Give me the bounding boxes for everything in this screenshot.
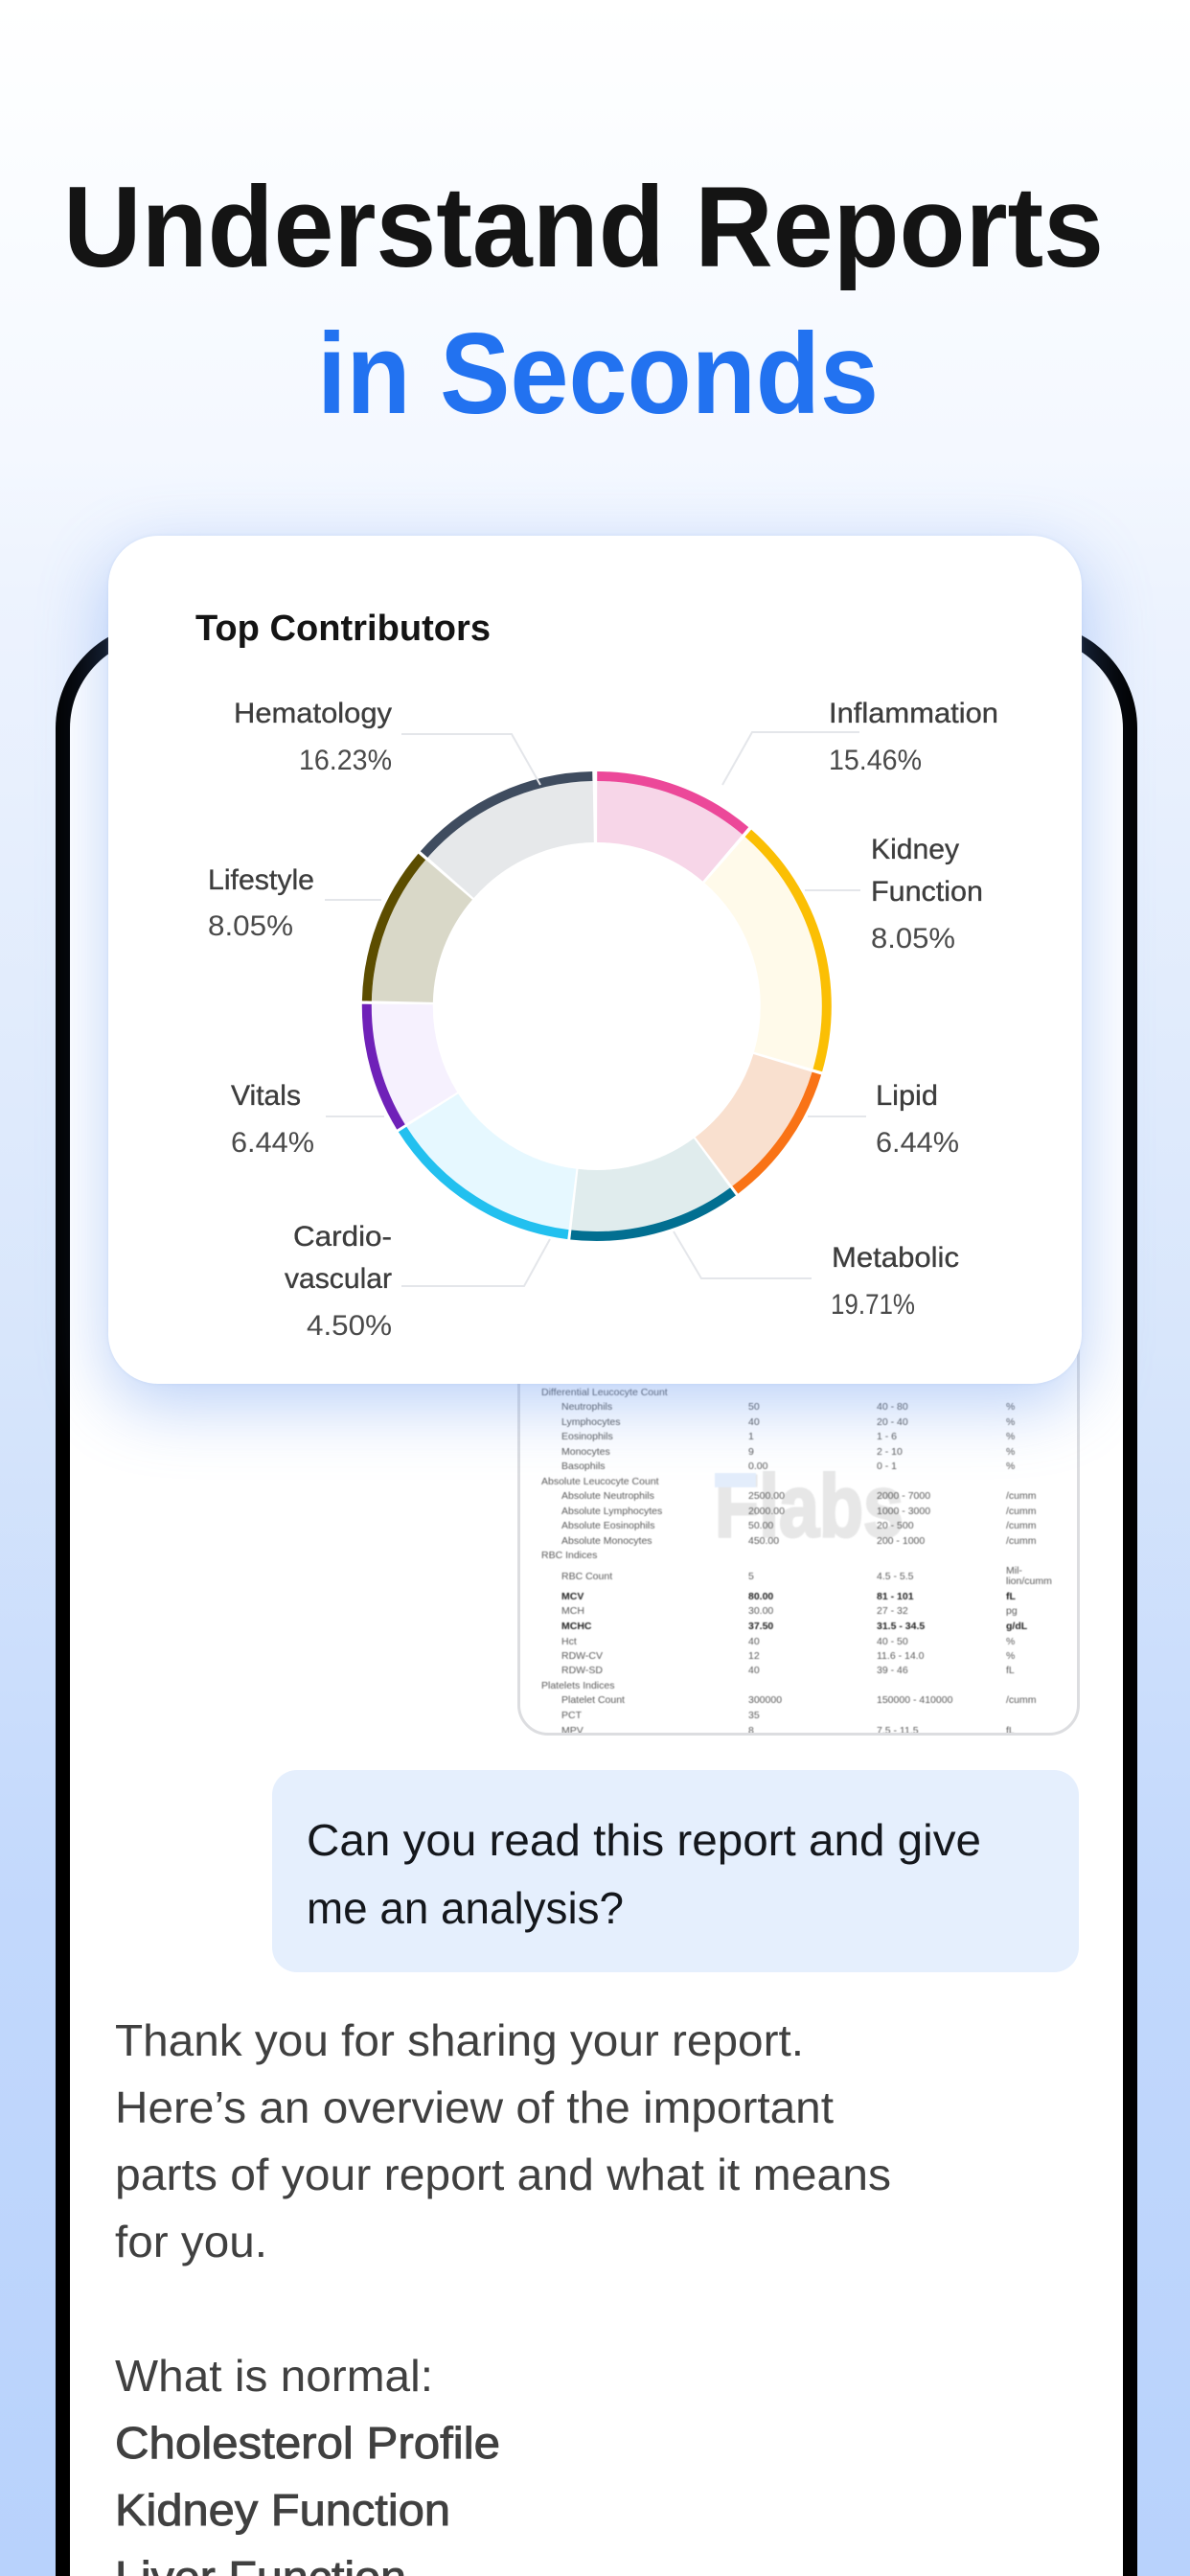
label: Inflammation: [722, 698, 998, 785]
report table rows: Absolute Leucocyte Count: [541, 1476, 659, 1487]
report table rows: 39 - 46: [877, 1665, 908, 1676]
report table rows: 0 - 1: [877, 1460, 897, 1472]
report table rows: lion/cumm: [1006, 1576, 1052, 1587]
label: Lifestyle: 8.05%: [208, 910, 293, 942]
report table rows: /cumm: [1006, 1535, 1037, 1547]
report table rows: 31.5 - 34.5: [877, 1621, 925, 1632]
report table rows: %: [1006, 1401, 1015, 1413]
text block: assistant reply: Kidney Function: [115, 2485, 450, 2535]
report table rows: 2000.00: [748, 1506, 785, 1517]
report table rows: Eosinophils: [561, 1431, 613, 1442]
report table rows: PCT: [561, 1710, 583, 1721]
report table rows: 4.5 - 5.5: [877, 1571, 914, 1582]
donut chart: [367, 776, 827, 1236]
label: Hematology: 16.23%: [299, 745, 392, 776]
label: Kidney Function: 8.05%: [871, 923, 955, 954]
text block: assistant reply: for you.: [115, 2217, 267, 2266]
report table rows: Absolute Lymphocytes: [561, 1506, 662, 1517]
report table rows: 1 - 6: [877, 1431, 897, 1442]
label: Cardiovascular: Cardio-: [293, 1221, 392, 1253]
report table rows: RBC Count: [561, 1571, 612, 1582]
panel: user chat bubble: Can you read this report and give: [307, 1815, 981, 1865]
label: Vitals: Vitals: [231, 1080, 301, 1112]
text block: assistant reply: Here’s an overview of the important: [115, 2082, 834, 2132]
report table rows: Mil-: [1006, 1565, 1022, 1576]
report table rows: 35: [748, 1710, 760, 1721]
watermark: Flabs: Flabs: [715, 1458, 904, 1555]
report table rows: Absolute Eosinophils: [561, 1520, 654, 1531]
report table rows: 0.00: [748, 1460, 768, 1472]
panel: user chat bubble: me an analysis?: [307, 1883, 624, 1933]
label: Lipid: Lipid: [876, 1080, 938, 1112]
report table rows: /cumm: [1006, 1694, 1037, 1706]
report table rows: MCHC: [561, 1621, 592, 1632]
text block: assistant reply: parts of your report and what it means: [115, 2150, 891, 2199]
report table rows: 150000 - 410000: [877, 1694, 953, 1706]
report table rows: 50: [748, 1401, 760, 1413]
label: Hematology: Hematology: [234, 698, 392, 729]
report table rows: 200 - 1000: [877, 1535, 925, 1547]
report table rows: 450.00: [748, 1535, 779, 1547]
report table rows: Differential Leucocyte Count: [541, 1387, 668, 1398]
report table rows: RBC Indices: [541, 1550, 597, 1561]
report table rows: %: [1006, 1650, 1015, 1662]
label: Cardiovascular: 4.50%: [307, 1310, 392, 1342]
label: Metabolic: Metabolic: [832, 1242, 959, 1274]
report table rows: 11.6 - 14.0: [877, 1650, 925, 1662]
report table rows: [541, 1387, 1052, 1736]
label: Inflammation: Inflammation: [829, 698, 998, 729]
report table rows: 80.00: [748, 1591, 773, 1602]
report table rows: Neutrophils: [561, 1401, 612, 1413]
report table rows: /cumm: [1006, 1520, 1037, 1531]
heading: Top Contributors: Top Contributors: [195, 609, 491, 649]
text block: assistant reply: Cholesterol Profile: [115, 2418, 500, 2468]
report table rows: %: [1006, 1416, 1015, 1428]
label: Lipid: 6.44%: [876, 1127, 959, 1159]
text block: assistant reply: Thank you for sharing your report.: [115, 2015, 804, 2065]
panel: user chat bubble: [272, 1770, 1079, 1972]
report table rows: fL: [1006, 1591, 1016, 1602]
report table rows: Basophils: [561, 1460, 606, 1472]
report table rows: 20 - 40: [877, 1416, 908, 1428]
phone frame: [56, 623, 1137, 2576]
report table rows: 30.00: [748, 1605, 773, 1617]
report table rows: %: [1006, 1446, 1015, 1458]
report table rows: 2000 - 7000: [877, 1490, 930, 1502]
report table rows: 2 - 10: [877, 1446, 903, 1458]
label: Vitals: [231, 1080, 384, 1159]
report table rows: Lymphocytes: [561, 1416, 620, 1428]
report table rows: 40: [748, 1665, 760, 1676]
report table rows: RDW-CV: [561, 1650, 603, 1662]
title: [63, 163, 1104, 438]
report table rows: 50.00: [748, 1520, 773, 1531]
label: Lifestyle: [208, 864, 381, 942]
report table rows: /cumm: [1006, 1490, 1037, 1502]
report table rows: 300000: [748, 1694, 782, 1706]
label: Lifestyle: Lifestyle: [208, 864, 314, 896]
report table rows: 40 - 80: [877, 1401, 908, 1413]
report table rows: Platelet Count: [561, 1694, 625, 1706]
report table rows: MCV: [561, 1591, 584, 1602]
report table rows: MCH: [561, 1605, 584, 1617]
report table rows: 9: [748, 1446, 754, 1458]
report table rows: Hct: [561, 1636, 577, 1647]
report table rows: 2500.00: [748, 1490, 785, 1502]
report table rows: RDW-SD: [561, 1665, 603, 1676]
report table rows: 40: [748, 1416, 760, 1428]
label: Vitals: 6.44%: [231, 1127, 314, 1159]
report table rows: %: [1006, 1431, 1015, 1442]
report table rows: 27 - 32: [877, 1605, 908, 1617]
report table rows: 37.50: [748, 1621, 773, 1632]
title: in Seconds: [317, 310, 879, 438]
label: Kidney Function: Function: [871, 876, 983, 908]
label: Hematology: [234, 698, 540, 785]
label: Metabolic: 19.71%: [831, 1289, 915, 1321]
report table rows: pg: [1006, 1605, 1018, 1617]
panel: top contributors card: [108, 536, 1082, 1384]
report table rows: g/dL: [1006, 1621, 1028, 1632]
label: Inflammation: 15.46%: [829, 745, 922, 776]
report table rows: %: [1006, 1636, 1015, 1647]
label: Kidney Function: [805, 834, 983, 954]
label: Cardiovascular: [285, 1221, 550, 1342]
label: Cardiovascular: vascular: [285, 1263, 392, 1295]
report table rows: 40 - 50: [877, 1636, 908, 1647]
label: Kidney Function: Kidney: [871, 834, 959, 865]
report table rows: /cumm: [1006, 1506, 1037, 1517]
report table rows: fL: [1006, 1665, 1015, 1676]
report table rows: 1: [748, 1431, 754, 1442]
report table rows: 20 - 500: [877, 1520, 914, 1531]
report table rows: Absolute Neutrophils: [561, 1490, 654, 1502]
label: Metabolic: [674, 1231, 959, 1321]
text block: assistant reply: What is normal:: [115, 2351, 433, 2401]
report table rows: Absolute Monocytes: [561, 1535, 652, 1547]
report table rows: 1000 - 3000: [877, 1506, 930, 1517]
title: Understand Reports: [63, 163, 1104, 291]
label: Lipid: [808, 1080, 959, 1159]
panel: lab report preview: [517, 1322, 1080, 1736]
report table rows: 40: [748, 1636, 760, 1647]
report table rows: Monocytes: [561, 1446, 610, 1458]
report table rows: 81 - 101: [877, 1591, 914, 1602]
report table rows: 12: [748, 1650, 760, 1662]
report table rows: Platelets Indices: [541, 1680, 614, 1691]
report table rows: %: [1006, 1460, 1015, 1472]
report table rows: 5: [748, 1571, 754, 1582]
